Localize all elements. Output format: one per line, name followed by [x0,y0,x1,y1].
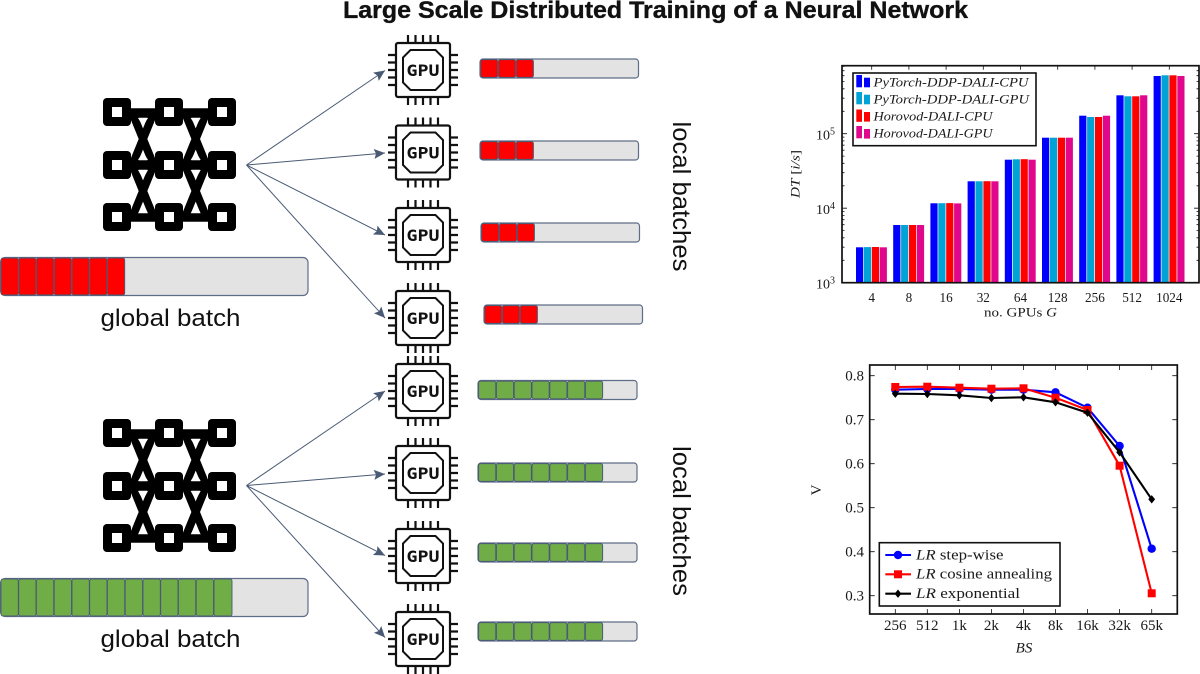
y axis tick labels [816,126,835,292]
label: local batches (bottom): local batches [667,446,695,596]
x axis tick labels: 4 [868,290,875,305]
arrows: green group [246,391,385,638]
bars [856,75,1184,283]
legend: LR cosine annealing [915,566,1052,582]
y axis tick labels: 3 [830,276,835,286]
legend: Horovod-DALI-GPU [872,126,994,140]
y axis tick labels: 0.7 [845,412,864,428]
x axis tick labels: 64 [1014,290,1028,305]
icon: GPU 3: GPU [406,226,440,245]
local batch bar green 3 [478,543,637,562]
x axis title: BS [1016,640,1033,656]
icon: neural network (green group) [103,419,236,552]
legend: PyTorch-DDP-DALI-CPU [872,74,1030,90]
legend [879,543,1060,606]
legend: PyTorch-DDP-DALI-GPU [872,92,1031,106]
x axis tick labels [884,618,1163,634]
y axis title: DT [i/s] [788,150,802,199]
x axis tick labels: 256 [884,618,907,634]
icon: neural network (red group) [103,98,236,231]
icon: GPU 7: GPU [406,547,440,566]
global batch bar (red) [0,258,308,296]
local batch bar red 3 [481,223,640,242]
bar chart: throughput vs GPUs [788,66,1199,320]
label: global batch: global batch [100,626,240,653]
icon: GPU 5 [388,356,458,426]
local batch bar green 2 [478,463,637,482]
icon: GPU 4 [388,283,458,353]
series: LR cosine annealing [891,383,1156,597]
series: LR exponential [892,390,1155,504]
icon: GPU 2 [388,118,458,188]
icon: GPU 4: GPU [406,309,440,328]
icon: GPU 7 [388,521,458,591]
y axis tick labels: 0.8 [845,368,864,384]
icon: GPU 1 [388,35,458,105]
y axis tick labels [845,368,864,604]
global batch bar (green) [0,578,308,616]
local batch bar red 1 [480,59,638,78]
x axis tick labels: 16 [940,290,953,305]
icon: GPU 3 [388,200,458,270]
icon: GPU 8 [388,604,458,674]
x axis tick labels [868,290,1183,305]
x axis tick labels: 2k [984,618,999,634]
legend: Horovod-DALI-CPU [872,108,994,124]
x axis tick labels: 512 [916,618,939,634]
x axis title: no. GPUs G [984,304,1058,320]
y axis tick labels: 0.3 [845,588,864,604]
y axis tick labels: 0.5 [845,500,864,516]
label: local batches (top): local batches [667,122,695,272]
icon: GPU 1: GPU [406,61,440,80]
x axis tick labels: 128 [1048,290,1068,305]
series: LR step-wise [891,385,1156,553]
x axis tick labels: 4k [1016,618,1032,634]
y axis tick labels: 4 [830,201,835,212]
x axis tick labels: 65k [1140,618,1163,634]
y axis tick labels: 5 [830,126,835,138]
x axis tick labels: 32 [977,290,990,305]
legend [853,73,1036,146]
y axis tick labels: 10 [816,203,830,218]
legend: LR exponential [915,586,1020,602]
icon: GPU 6 [388,438,458,508]
x axis tick labels: 8k [1048,618,1064,634]
local batch bar red 4 [484,305,642,324]
y axis tick labels: 0.4 [845,544,864,560]
local batch bar green 4 [478,622,637,641]
panel: red global batch network [0,98,308,332]
x axis tick labels: 32k [1108,618,1131,634]
local batch bar green 1 [478,380,637,400]
x axis tick labels: 512 [1122,290,1142,305]
arrows: red group [246,70,385,318]
icon: GPU 8: GPU [406,630,440,649]
y axis tick labels: 0.6 [845,456,864,472]
legend: LR step-wise [915,548,1004,564]
local batch bar red 2 [480,141,638,160]
y axis tick labels: 10 [816,128,830,144]
axes frame [870,365,1177,614]
panel: green global batch network [0,419,308,653]
icon: GPU 6: GPU [406,464,440,483]
line chart: V vs batch size [809,365,1177,656]
x axis tick labels: 8 [906,290,913,305]
x axis tick labels: 1k [952,618,967,634]
label: global batch: global batch [100,305,240,332]
x axis tick labels: 16k [1076,618,1099,634]
icon: GPU 2: GPU [406,144,440,162]
axes frame [842,66,1199,283]
icon: GPU 5: GPU [406,382,440,401]
x axis tick labels: 1024 [1156,290,1183,305]
y axis title: V [809,484,825,495]
x axis tick labels: 256 [1085,290,1105,305]
y axis tick labels: 10 [816,278,830,292]
